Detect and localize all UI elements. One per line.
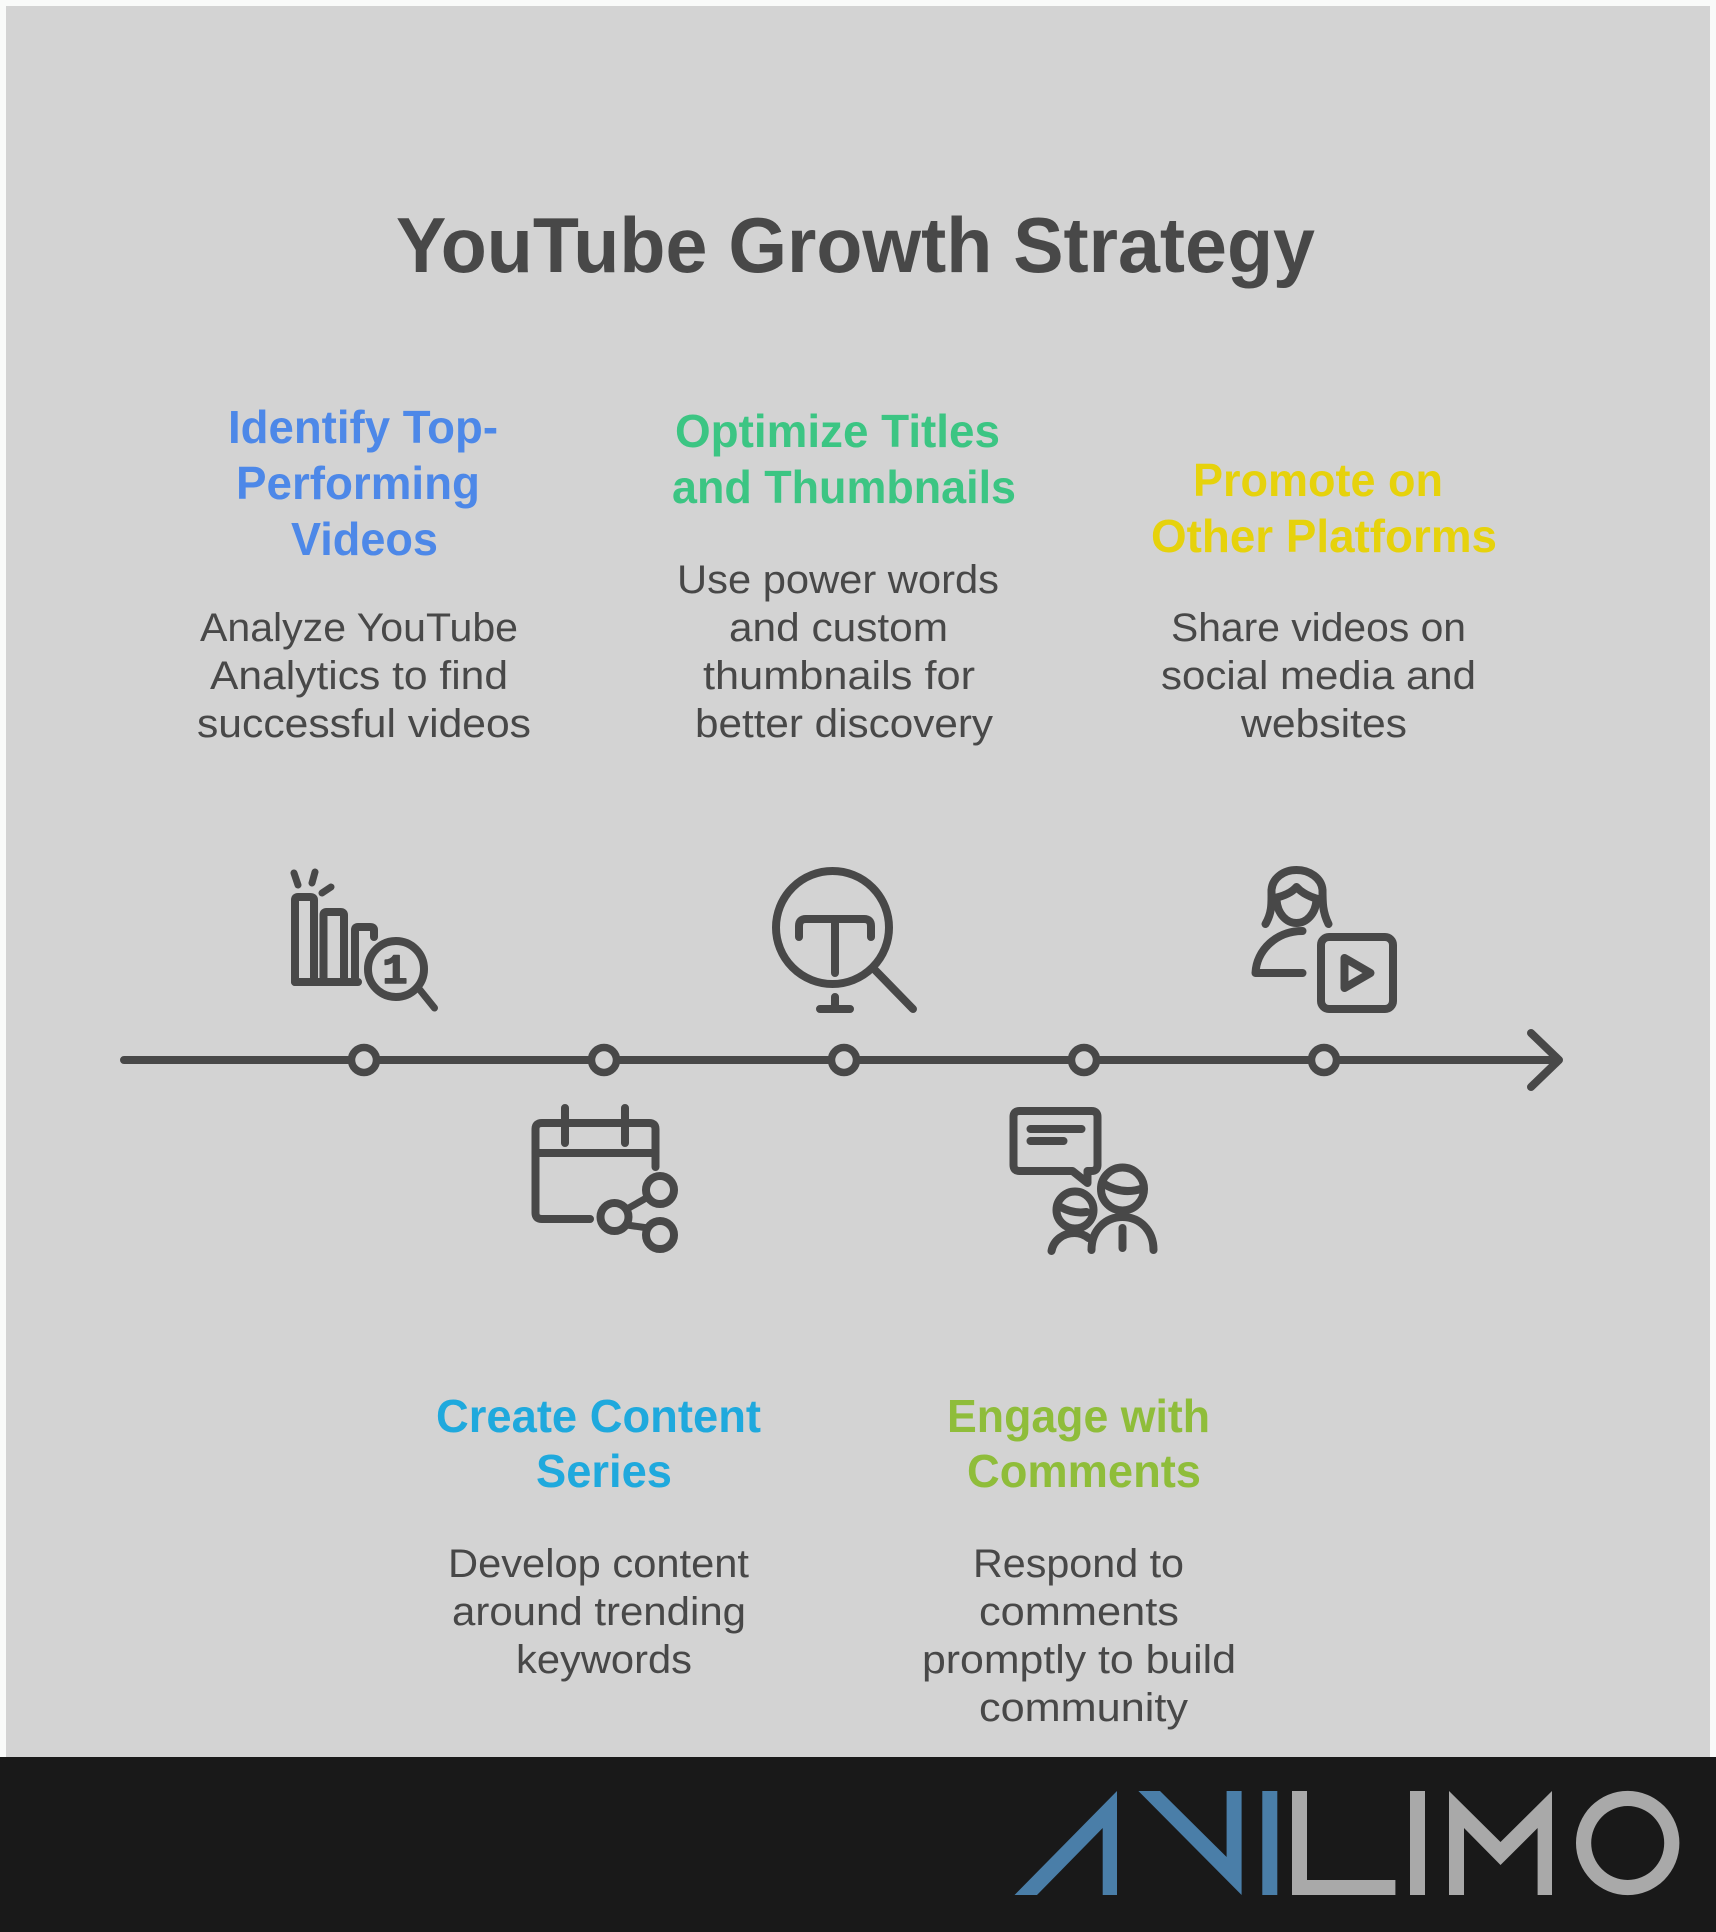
step 3 text: Optimize Titles and Thumbnails bbox=[672, 405, 1016, 746]
description: step 1: Analytics to find bbox=[210, 654, 508, 698]
description: step 5 bbox=[1161, 606, 1476, 746]
description: step 3: better discovery bbox=[695, 702, 993, 746]
heading: step 4: Engage with bbox=[947, 1390, 1210, 1442]
description: step 5: Share videos on bbox=[1171, 606, 1466, 650]
icon: calendar with share nodes bbox=[536, 1108, 674, 1249]
step 5 text: Promote on Other Platforms bbox=[1151, 454, 1497, 746]
description: step 1: Analyze YouTube bbox=[200, 606, 518, 650]
heading: step 3: Optimize Titles bbox=[675, 405, 1000, 457]
description: step 4: comments bbox=[979, 1590, 1179, 1634]
icon: woman with video player bbox=[1256, 870, 1393, 1009]
icon: magnifier over letter T bbox=[776, 871, 913, 1009]
description: step 4: Respond to bbox=[973, 1542, 1184, 1586]
description: step 2: keywords bbox=[516, 1638, 692, 1682]
description: step 3: and custom bbox=[729, 606, 948, 650]
description: step 4 bbox=[922, 1542, 1236, 1730]
description: step 2: around trending bbox=[452, 1590, 746, 1634]
heading: step 5 bbox=[1151, 454, 1497, 562]
heading: step 1: Videos bbox=[291, 513, 438, 565]
description: step 4: community bbox=[979, 1686, 1188, 1730]
heading: step 5: Other Platforms bbox=[1151, 510, 1497, 562]
description: step 5: social media and bbox=[1161, 654, 1476, 698]
timeline arrow with five nodes bbox=[124, 1033, 1559, 1087]
node 4 bbox=[1072, 1048, 1096, 1072]
heading: step 3: and Thumbnails bbox=[672, 461, 1016, 513]
description: step 1 bbox=[197, 606, 531, 746]
icon: person with comment bubble group bbox=[1014, 1111, 1154, 1251]
step 1 text: Identify Top-Performing Videos bbox=[197, 401, 531, 746]
node 1 bbox=[352, 1048, 376, 1072]
heading: step 2 bbox=[436, 1390, 761, 1497]
node 5 bbox=[1312, 1048, 1336, 1072]
footer bar bbox=[0, 1757, 1716, 1932]
icon: bar chart with ranked magnifier bbox=[294, 872, 434, 1008]
heading: step 1 bbox=[228, 401, 498, 565]
logo blue letters bbox=[1014, 1791, 1277, 1895]
arrow: timeline axis bbox=[124, 1033, 1559, 1087]
icon: bar chart with ranked magnifier: 1 bbox=[382, 948, 408, 996]
step 2 text: Create Content Series bbox=[436, 1390, 761, 1682]
heading: step 5: Promote on bbox=[1193, 454, 1443, 506]
heading: step 3 bbox=[672, 405, 1016, 513]
heading: step 4 bbox=[947, 1390, 1210, 1497]
heading: step 2: Create Content bbox=[436, 1390, 761, 1442]
logo: ANILIMO bbox=[1014, 1791, 1679, 1895]
logo grey letters bbox=[1292, 1791, 1679, 1895]
description: step 4: promptly to build bbox=[922, 1638, 1236, 1682]
title: YouTube Growth Strategy bbox=[396, 201, 1315, 289]
description: step 3 bbox=[677, 558, 999, 746]
description: step 3: Use power words bbox=[677, 558, 999, 602]
node 3 bbox=[832, 1048, 856, 1072]
description: step 5: websites bbox=[1240, 702, 1407, 746]
description: step 3: thumbnails for bbox=[703, 654, 975, 698]
heading: step 1: Identify Top- bbox=[228, 401, 498, 453]
node 2 bbox=[592, 1048, 616, 1072]
description: step 2 bbox=[448, 1542, 749, 1682]
heading: step 1: Performing bbox=[236, 457, 480, 509]
description: step 1: successful videos bbox=[197, 702, 531, 746]
step 4 text: Engage with Comments bbox=[922, 1390, 1236, 1730]
heading: step 2: Series bbox=[536, 1445, 672, 1497]
heading: step 4: Comments bbox=[967, 1445, 1201, 1497]
description: step 2: Develop content bbox=[448, 1542, 749, 1586]
